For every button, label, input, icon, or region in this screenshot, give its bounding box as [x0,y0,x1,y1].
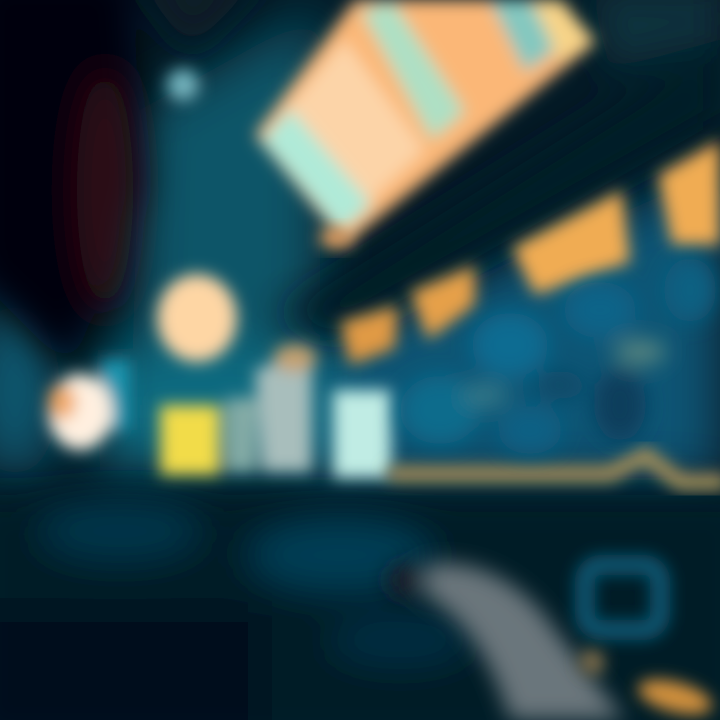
icon: glow under sign corner [319,228,351,248]
panel: dark lower band [0,495,720,720]
stripe: teal upper right [490,0,558,72]
panel: dark upper left figure [0,0,270,370]
stripe: pale peach [285,40,425,205]
chart: gold wavy line band [395,455,720,482]
stripe: yellow corner [532,0,594,62]
row: blue mosaic shapes [400,258,716,454]
panel: slanted striped sign [255,0,596,245]
icon: bottom orange marks [579,649,716,720]
row: left lights [48,274,391,478]
stripe: mint centre [362,0,465,140]
stripe: mint lower left [262,108,372,232]
panel: dark diagonal beam [280,0,720,335]
row: orange blobs on diagonal [340,140,720,365]
panel: teal midground [0,10,720,480]
icon: rounded square outline [585,565,660,630]
icon: blurred gray hand [389,563,625,720]
icon: small pale light [167,69,199,101]
